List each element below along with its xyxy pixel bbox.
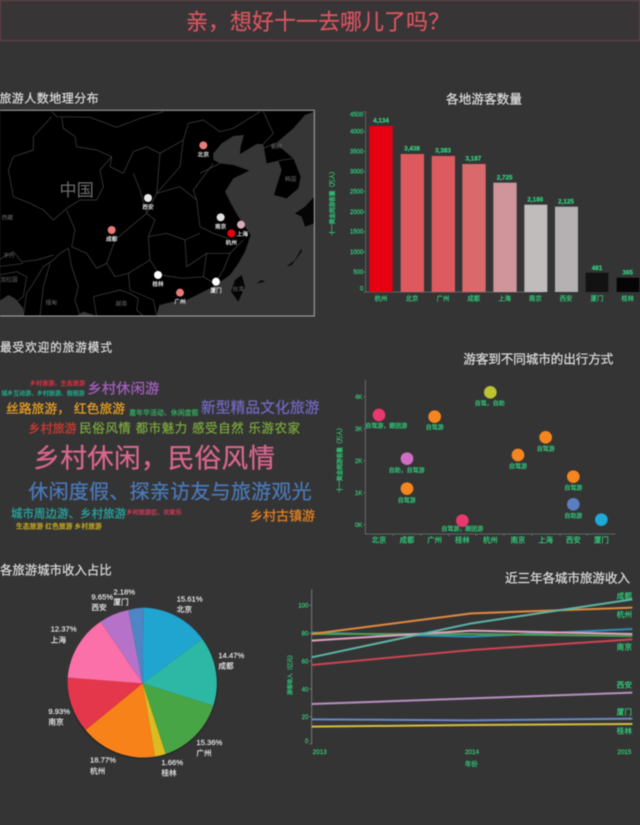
- word cloud: 乡村古镇游: [250, 508, 315, 523]
- panel: scatter chart of travel modes: [336, 351, 615, 545]
- y axis: 1000: [350, 250, 364, 256]
- pie labels: 1.66%: [161, 758, 183, 767]
- scatter axes: 4K: [355, 395, 362, 401]
- city markers: 南京: [215, 222, 227, 230]
- map labels: 缅甸: [46, 299, 57, 307]
- bar category labels: 西安: [560, 294, 572, 303]
- y axis: 500: [353, 270, 364, 276]
- bar category labels: 南京: [529, 294, 542, 303]
- bar value labels: 4,134: [373, 118, 389, 125]
- pie labels: 9.93%: [48, 707, 70, 716]
- pie labels: 桂林: [161, 767, 177, 777]
- word cloud: 休闲度假、探亲访友与旅游观光: [28, 480, 312, 503]
- word cloud heading: 最受欢迎的旅游模式: [0, 341, 112, 355]
- scatter point labels: [365, 400, 582, 533]
- map labels: 台湾: [232, 285, 244, 293]
- y axis: 十一黄金周游客量（万人）: [329, 168, 337, 236]
- line end labels: 南京: [617, 641, 632, 651]
- line chart axes: 2015: [617, 749, 632, 756]
- pie labels: 15.36%: [196, 738, 222, 747]
- pie labels: 北京: [177, 604, 192, 614]
- bar value labels: 3,187: [465, 156, 482, 163]
- word cloud: 城市周边游、乡村旅游: [11, 506, 126, 520]
- city markers: 厦门: [210, 287, 222, 295]
- map labels: 中国: [59, 180, 94, 200]
- pie labels: 15.61%: [177, 595, 203, 604]
- word cloud: 新型精品文化旅游: [201, 399, 320, 416]
- title banner: [0, 0, 640, 40]
- scatter point labels: 自驾游: [564, 484, 582, 492]
- map labels: 越南: [116, 299, 127, 307]
- bar value labels: 481: [592, 265, 603, 272]
- pie labels: 南京: [48, 717, 64, 727]
- panel: tourist geographic map: [0, 91, 314, 316]
- scatter axes: 1K: [355, 491, 362, 497]
- scatter axes: [336, 380, 615, 545]
- line chart axes: 20: [302, 715, 309, 721]
- bar category labels: 杭州: [375, 294, 387, 303]
- bar category labels: [375, 294, 635, 303]
- map labels: 不丹: [3, 252, 15, 259]
- bar value labels: [373, 118, 633, 277]
- income lines: [312, 599, 632, 727]
- y axis: 2000: [350, 210, 364, 216]
- y axis: 4500: [350, 113, 364, 119]
- scatter axes: 西安: [566, 536, 581, 545]
- scatter point labels: 自助游: [564, 512, 582, 520]
- scatter point labels: 自驾游: [537, 445, 555, 453]
- pie labels: 2.18%: [113, 587, 135, 596]
- bars: [369, 126, 639, 292]
- line chart axes: 60: [302, 659, 309, 665]
- line chart axes: 2014: [465, 749, 480, 756]
- pie labels: 成都: [218, 661, 234, 671]
- scatter axes: 十一黄金周游客量（万人）: [336, 424, 344, 493]
- scatter axes: 桂林: [455, 536, 470, 545]
- y axis: [329, 112, 543, 292]
- city markers: [106, 141, 248, 306]
- y axis: 1500: [350, 230, 364, 236]
- y axis: 0: [360, 286, 364, 292]
- scatter axes: 广州: [427, 536, 442, 545]
- line chart axes: 80: [302, 632, 309, 638]
- bar category labels: 成都: [467, 294, 481, 303]
- map: [0, 110, 314, 316]
- scatter axes: 南京: [511, 536, 525, 545]
- scatter point labels: 自助，自驾游: [389, 466, 425, 474]
- bar category labels: 广州: [437, 294, 449, 303]
- bar chart heading: 各地游客数量: [446, 91, 522, 106]
- y axis: 4000: [350, 130, 364, 136]
- word cloud: 乡村旅游、生态旅游: [30, 380, 85, 388]
- map labels: 韩国: [285, 175, 297, 183]
- bar value labels: 3,438: [404, 146, 420, 153]
- bar category labels: 北京: [406, 294, 418, 303]
- pie labels: 18.77%: [90, 756, 116, 765]
- pie labels: 14.47%: [218, 651, 244, 660]
- word cloud: 乡村休闲，民俗风情: [33, 444, 275, 474]
- city markers: 成都: [106, 235, 118, 243]
- line chart heading: 近三年各城市旅游收入: [505, 571, 630, 586]
- word cloud: [1, 380, 320, 531]
- scatter points: [373, 386, 608, 527]
- panel: pie chart of income share: [0, 562, 244, 777]
- line end labels: 成都: [617, 590, 632, 600]
- city markers: 桂林: [152, 280, 164, 288]
- line chart axes: 100: [298, 604, 309, 610]
- bar category labels: 厦门: [591, 294, 603, 303]
- panel: word cloud of tourism modes: [0, 341, 320, 531]
- map labels: [0, 142, 297, 307]
- pie heading: 各旅游城市收入占比: [0, 562, 112, 577]
- word cloud: 丝路旅游， 红色旅游: [6, 401, 125, 416]
- scatter point labels: 自驾游: [426, 424, 444, 432]
- pie labels: [48, 587, 244, 777]
- pie labels: 广州: [196, 747, 212, 757]
- line end labels: [617, 590, 632, 736]
- scatter point labels: 自驾游，跟团游: [441, 525, 483, 533]
- line chart axes: 游客收入（亿元）: [286, 652, 294, 695]
- word cloud: 生态旅游 红色旅游 乡村旅游: [16, 522, 102, 531]
- city markers: 北京: [198, 150, 209, 158]
- word cloud: 民俗风情 都市魅力 感受自然 乐游农家: [79, 421, 300, 436]
- line end labels: 厦门: [617, 706, 632, 716]
- panel: bar chart of visitor counts: [329, 91, 639, 303]
- scatter axes: 3K: [355, 427, 362, 433]
- scatter axes: 0K: [355, 523, 362, 529]
- map labels: 朝鲜: [271, 142, 283, 150]
- line chart axes: 0: [305, 739, 309, 745]
- title banner: 亲，想好十一去哪儿了吗？: [186, 4, 450, 36]
- word cloud: 乡村旅游区、农家乐: [127, 508, 182, 516]
- city markers: 西安: [142, 203, 154, 211]
- bar value labels: 365: [622, 270, 633, 277]
- scatter point labels: 自驾游: [509, 462, 527, 470]
- word cloud: 城乡互动游、乡村旅游、假假游: [1, 389, 85, 397]
- line end labels: 桂林: [617, 726, 632, 736]
- line chart axes: 40: [302, 687, 309, 693]
- map labels: 西藏: [2, 213, 13, 221]
- line chart axes: [286, 589, 632, 768]
- scatter axes: 杭州: [483, 536, 498, 545]
- scatter axes: 上海: [538, 536, 554, 545]
- scatter point labels: 自驾，自助: [475, 400, 505, 408]
- bar value labels: 2,725: [497, 175, 513, 182]
- line chart axes: 2013: [313, 749, 327, 756]
- y axis: 2500: [350, 190, 364, 196]
- city markers: 上海: [237, 230, 248, 238]
- bar category labels: 上海: [498, 294, 512, 303]
- pie labels: 12.37%: [51, 625, 77, 634]
- scatter axes: 2K: [355, 459, 362, 465]
- bar category labels: 桂林: [621, 294, 635, 303]
- y axis: 3000: [350, 170, 364, 176]
- scatter axes: 成都: [400, 536, 415, 545]
- pie labels: 上海: [51, 634, 66, 644]
- y axis: 3500: [350, 150, 364, 156]
- pie labels: 厦门: [113, 597, 129, 607]
- panel: line chart of three-year income: [286, 571, 632, 768]
- word cloud: 嘉年华活动、休闲度假: [129, 408, 199, 417]
- map heading: 旅游人数地理分布: [0, 91, 99, 106]
- line end labels: 杭州: [617, 609, 632, 619]
- bar value labels: 2,125: [558, 199, 574, 206]
- line end labels: 西安: [617, 680, 632, 690]
- city markers: 广州: [174, 298, 186, 306]
- city markers: 杭州: [226, 238, 237, 246]
- pie labels: 西安: [91, 602, 107, 612]
- word cloud: 乡村休闲游: [87, 380, 159, 397]
- bar value labels: 2,186: [527, 196, 544, 203]
- scatter axes: 厦门: [594, 536, 609, 545]
- scatter axes: 北京: [372, 536, 386, 545]
- pie labels: 杭州: [90, 765, 105, 775]
- pie chart: [67, 608, 218, 759]
- scatter point labels: 自驾游，跟团游: [365, 422, 407, 430]
- scatter point labels: 自驾游: [398, 496, 416, 504]
- line chart axes: 年份: [465, 759, 478, 768]
- scatter heading: 游客到不同城市的出行方式: [463, 351, 614, 366]
- pie labels: 9.65%: [91, 593, 113, 602]
- bar value labels: 3,383: [435, 148, 451, 155]
- word cloud: 乡村旅游: [28, 422, 77, 436]
